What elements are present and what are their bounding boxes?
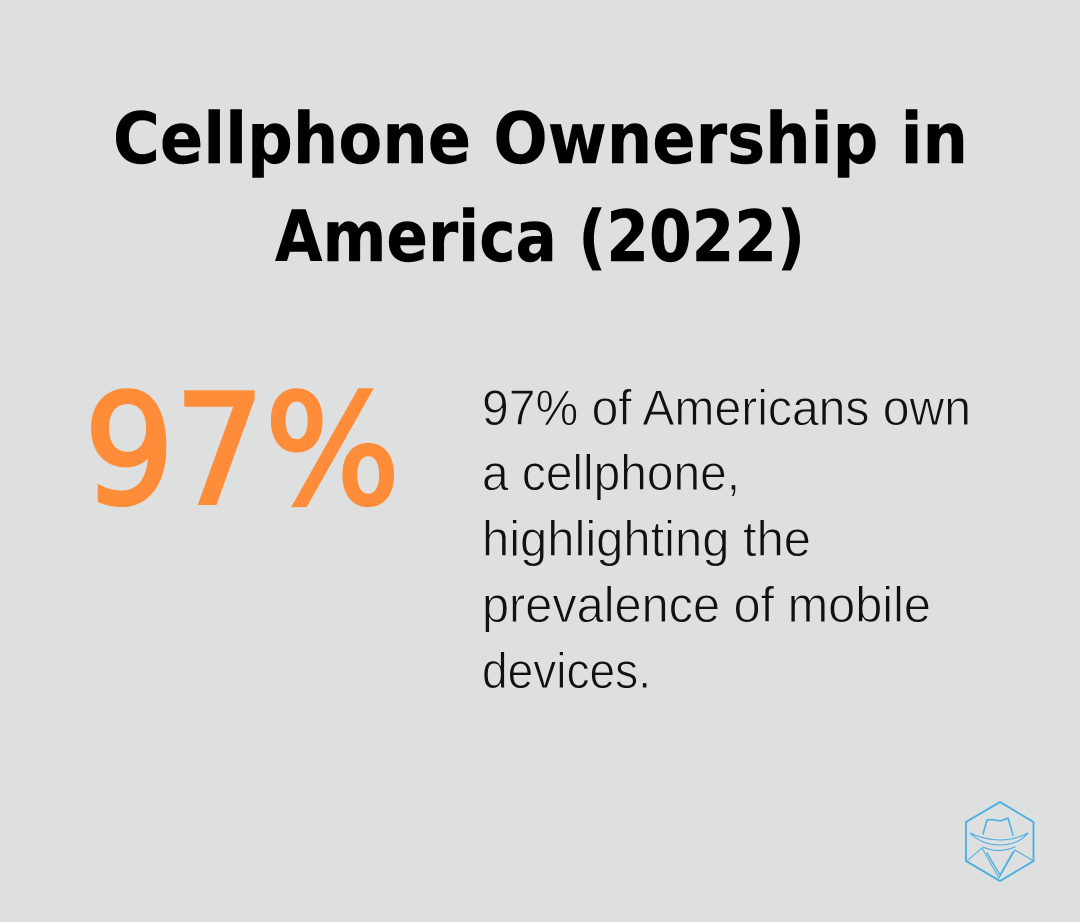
icon: hexagon logo with hat (966, 802, 1034, 881)
description text: 97% of Americans own (482, 380, 971, 436)
description text: devices. (482, 643, 651, 699)
big statistic: 97%: 97% (84, 362, 400, 539)
description text: a cellphone, (482, 445, 740, 501)
description text (482, 380, 971, 699)
description text: prevalence of mobile (482, 577, 931, 633)
title: Cellphone Ownership in (113, 98, 968, 180)
title (113, 98, 968, 278)
description text: highlighting the (482, 511, 811, 567)
title: America (2022) (275, 196, 805, 278)
